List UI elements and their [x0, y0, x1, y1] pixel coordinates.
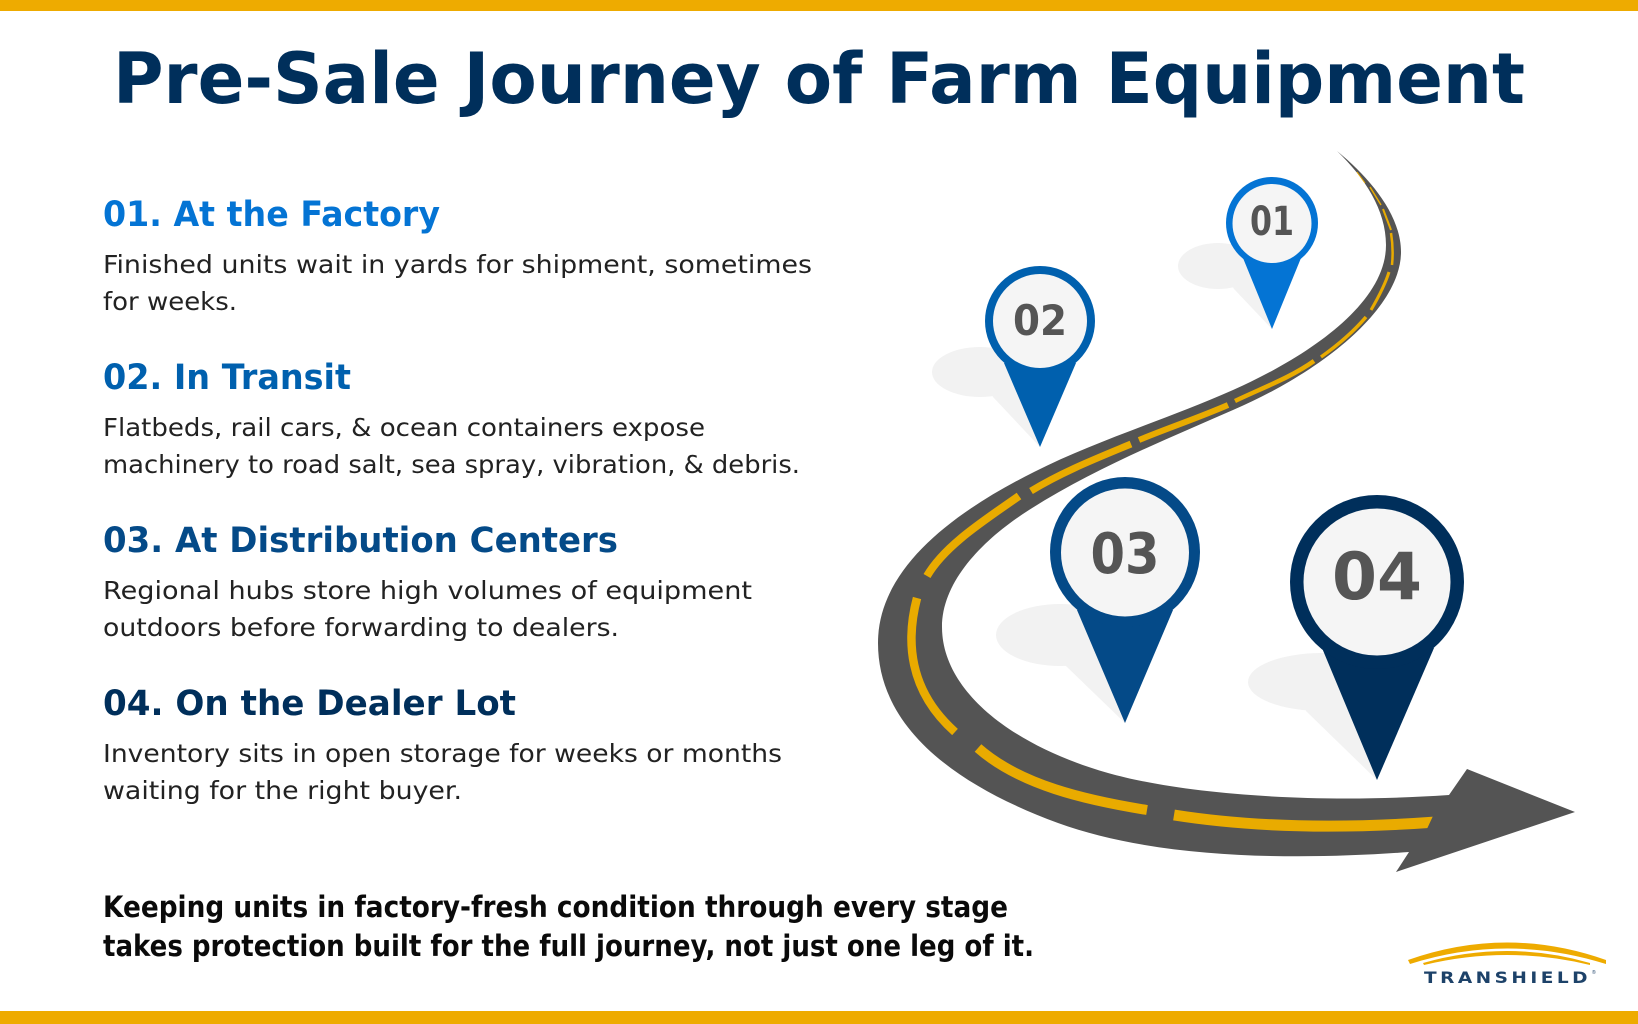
stage 01 text block: for weeks.: [103, 287, 237, 316]
stage 02 text block: 02. In Transit: [103, 358, 351, 398]
stage 04 text block: Inventory sits in open storage for weeks or months: [103, 739, 782, 768]
stage 03 text block: [103, 521, 752, 642]
stage 04 text block: [103, 684, 782, 805]
road surface: [878, 151, 1575, 872]
stage 03 text block: outdoors before forwarding to dealers.: [103, 613, 619, 642]
logo: Transhield: ®: [1592, 969, 1596, 976]
closing statement: Keeping units in factory-fresh condition through every stage: [103, 890, 1008, 924]
pin 04: [1248, 495, 1464, 780]
stage 02 text block: machinery to road salt, sea spray, vibration, & debris.: [103, 450, 800, 479]
stage 04 text block: waiting for the right buyer.: [103, 776, 462, 805]
stage 04 text block: 04. On the Dealer Lot: [103, 684, 516, 724]
stage 03 text block: 03. At Distribution Centers: [103, 521, 618, 561]
closing statement: takes protection built for the full journey, not just one leg of it.: [103, 929, 1034, 963]
pin 01: 01: [1250, 199, 1294, 245]
stage 02 text block: [103, 358, 800, 479]
stage 01 text block: 01. At the Factory: [103, 195, 440, 235]
stage 01 text block: Finished units wait in yards for shipment, sometimes: [103, 250, 812, 279]
pin 02: 02: [1013, 296, 1067, 345]
pin 02: [932, 266, 1095, 447]
closing statement: [103, 890, 1034, 963]
title: Pre-Sale Journey of Farm Equipment: [113, 38, 1525, 120]
yellow centre line: [911, 172, 1448, 831]
stage 02 text block: Flatbeds, rail cars, & ocean containers expose: [103, 413, 705, 442]
road arrow: [878, 151, 1575, 872]
logo: Transhield: TRANSHIELD: [1424, 968, 1591, 987]
pin 01: [1178, 177, 1318, 329]
pin 03: [996, 477, 1200, 723]
stage 01 text block: [103, 195, 812, 316]
stage 03 text block: Regional hubs store high volumes of equipment: [103, 576, 752, 605]
pin 03: 03: [1090, 522, 1160, 587]
logo: Transhield: [1408, 942, 1606, 987]
panel: journey stages: [103, 195, 812, 805]
pin 04: 04: [1332, 540, 1422, 615]
